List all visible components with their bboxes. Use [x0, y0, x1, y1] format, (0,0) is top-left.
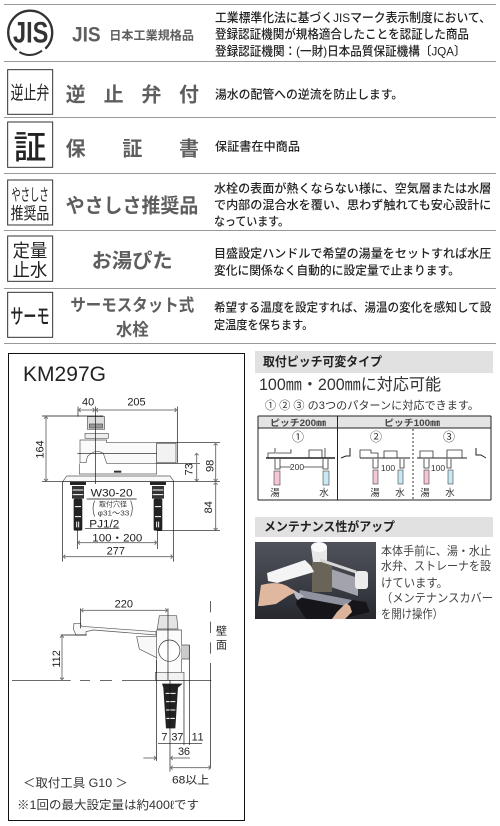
pattern 3: 100 [431, 463, 445, 473]
icon: JIS mark: JIS [13, 16, 48, 49]
description: 湯水の配管への逆流を防止します。 [215, 87, 403, 102]
side view drawing: 面 [216, 639, 227, 651]
front view drawing: 73 [184, 463, 196, 475]
JIS description [215, 10, 491, 58]
heading: お湯ぴた: お湯ぴた [92, 249, 173, 272]
feature row: fixed quantity stop [8, 236, 491, 281]
description [214, 300, 491, 332]
pattern 3 [417, 448, 486, 499]
description: 保証書在中商品 [215, 139, 300, 154]
front view drawing: 100・200 [92, 533, 142, 545]
side view drawing: 68以上 [172, 774, 209, 787]
heading: 保証書: 証 [122, 138, 142, 160]
pattern 1: 湯 [270, 487, 280, 499]
icon: やさしさ推奨品 [8, 180, 53, 225]
maintenance text: 水弁、ストレーナを設 [381, 558, 491, 573]
front view drawing [34, 396, 220, 562]
feature row: check valve [8, 70, 403, 114]
pattern 2: 湯 [370, 487, 380, 499]
pattern 1: 水 [319, 487, 329, 499]
side view drawing: 7 [161, 732, 167, 744]
pattern 2: 100 [381, 463, 395, 473]
maintenance text [381, 543, 493, 621]
description: 変化に関係なく自動的に設定量で止まります。 [214, 262, 460, 277]
section heading [255, 517, 493, 537]
icon: やさしさ推奨品: やさしさ [11, 185, 49, 204]
front view drawing: φ31～33 [98, 509, 129, 518]
front view drawing: PJ1/2 [89, 519, 119, 531]
heading: 逆止弁付 [66, 82, 199, 106]
pitch table [258, 416, 491, 500]
heading: 逆止弁付: 付 [179, 83, 199, 106]
pitch subheading: 100㎜・200㎜に対応可能 [259, 375, 441, 394]
feature row: JIS [8, 10, 491, 58]
icon: 証: 証 [14, 129, 46, 166]
pitch table: ② [370, 430, 382, 444]
panel: maintenance [255, 517, 493, 621]
panel: dimension drawing [8, 354, 244, 820]
pitch table: ① [292, 430, 304, 444]
feature row: warranty [8, 122, 300, 167]
heading: サーモスタット式水栓: サーモスタット式 [70, 295, 194, 315]
section heading: 取付ピッチ可変タイプ [263, 354, 382, 369]
tool note: ＜取付工具 G10 ＞ [23, 776, 128, 790]
side view drawing: 壁 [216, 624, 227, 637]
model name: KM297G [23, 363, 106, 386]
JIS description: 登録認証機関が規格適合したことを認証した商品 [215, 27, 469, 42]
heading: サーモスタット式水栓: 水栓 [116, 320, 149, 340]
icon: 定量止水: 止水 [13, 260, 47, 280]
description: で内部の混合水を覆い、思わず触れても安心設計に [214, 197, 491, 212]
maintenance text: を開け操作） [381, 606, 443, 621]
icon: 逆止弁: 逆止弁 [11, 83, 49, 104]
pattern note: ① ② ③ の3つのパターンに対応できます。 [265, 399, 479, 412]
panel: variable pitch type [255, 351, 493, 500]
heading: 逆止弁付: 弁 [141, 82, 161, 106]
feature row: gentle product [8, 180, 491, 229]
icon: サーモ [8, 292, 53, 337]
front view drawing: 164 [34, 440, 46, 459]
pitch table: ③ [443, 430, 455, 444]
description [214, 180, 491, 229]
feature row: thermostat [8, 292, 491, 340]
side view drawing: 112 [51, 650, 63, 668]
front view drawing: 84 [203, 501, 215, 513]
icon: やさしさ推奨品: 推奨品 [11, 204, 49, 223]
side view drawing: 11 [192, 732, 204, 744]
heading: 保証書: 保 [66, 137, 86, 160]
heading: やさしさ推奨品: やさしさ推奨品 [66, 194, 198, 217]
pattern 2 [341, 448, 410, 499]
JIS heading: JIS [72, 22, 101, 46]
pattern 1 [266, 448, 335, 499]
description: 目盛設定ハンドルで希望の湯量をセットすれば水圧 [214, 246, 491, 261]
front view drawing: W30-20 [91, 488, 133, 500]
maintenance text: （メンテナンスカバー [381, 591, 493, 605]
description: 水栓の表面が熱くならない様に、空気層または水層 [214, 180, 491, 195]
front view drawing: 98 [204, 460, 216, 472]
section heading: メンテナンス性がアップ [264, 519, 395, 534]
description: なっています。 [214, 215, 289, 229]
capacity note: ※1回の最大設定量は約400ℓです [17, 797, 199, 812]
JIS heading: 日本工業規格品 [109, 27, 194, 42]
heading: 保証書 [66, 137, 199, 160]
heading: 保証書: 書 [179, 137, 199, 160]
icon: サーモ: サーモ [10, 305, 50, 328]
icon: JIS mark [8, 11, 52, 55]
JIS heading [72, 22, 194, 46]
heading: 逆止弁付: 逆 [66, 83, 86, 106]
pitch table: ピッチ200㎜ [270, 418, 326, 428]
pattern 3: 水 [445, 487, 455, 499]
icon: 証 [8, 122, 53, 167]
front view drawing: 40 [82, 396, 94, 408]
heading: サーモスタット式水栓 [70, 295, 194, 340]
front view drawing: 取付穴径 [99, 500, 127, 509]
side view drawing: 220 [115, 599, 133, 611]
pattern 3: 湯 [420, 487, 430, 499]
maintenance text: けています。 [381, 576, 448, 590]
JIS description: 登録認証機関：(一財)日本品質保証機構〔JQA〕 [215, 43, 466, 58]
icon: 定量止水 [8, 236, 53, 281]
side view drawing [12, 599, 227, 787]
JIS description: 工業標準化法に基づくJISマーク表示制度において、 [215, 10, 491, 25]
maintenance text: 本体手前に、湯・水止 [381, 543, 491, 558]
icon: 逆止弁 [8, 70, 53, 114]
description [214, 246, 491, 277]
photo: faucet maintenance [255, 542, 376, 619]
pattern 2: 水 [395, 487, 405, 499]
pitch table: ピッチ100㎜ [384, 418, 440, 428]
icon: 定量止水: 定量 [13, 241, 47, 261]
front view drawing: 205 [127, 396, 146, 408]
pattern 1: 200 [290, 462, 304, 472]
heading: 逆止弁付: 止 [104, 83, 124, 106]
side view drawing: 37 [171, 732, 183, 744]
section heading [255, 351, 493, 373]
description: 希望する温度を設定すれば、湯温の変化を感知して設 [214, 300, 491, 315]
description: 定温度を保ちます。 [214, 317, 313, 332]
front view drawing: 277 [107, 545, 125, 557]
side view drawing: 36 [178, 746, 190, 758]
